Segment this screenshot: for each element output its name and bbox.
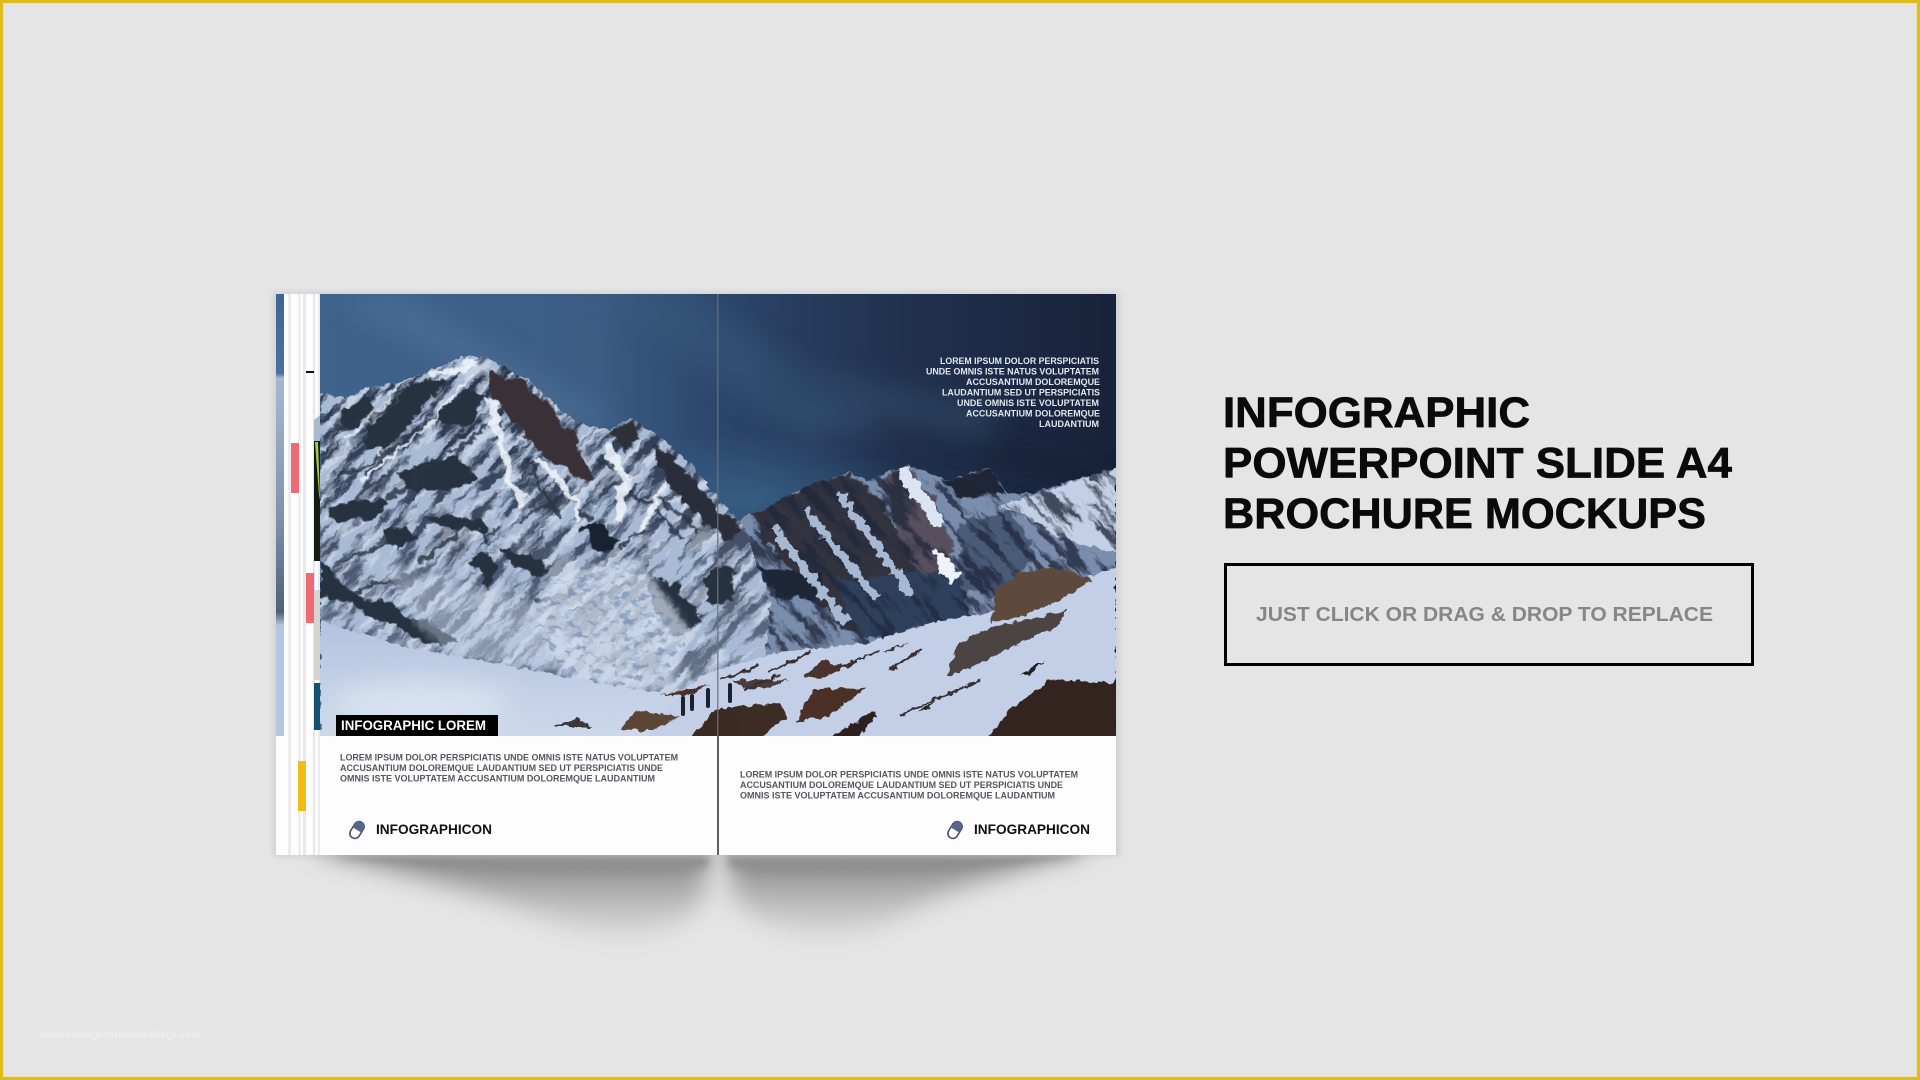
dark rock streaks <box>340 395 700 600</box>
sky <box>320 294 1116 736</box>
text block: photo caption, right page: LAUDANTIUM SED UT PERSPICIATIS <box>942 388 1101 398</box>
text block: right page: LOREM IPSUM DOLOR PERSPICIATIS UNDE OMNIS ISTE NATUS VOLUPTATEM <box>740 770 1078 780</box>
text block: photo caption, right page: LAUDANTIUM <box>1039 419 1099 430</box>
title: INFOGRAPHIC <box>1223 390 1530 437</box>
white text panels <box>320 736 1116 855</box>
foreground snowfield <box>320 620 678 736</box>
text block: photo caption, right page: ACCUSANTIUM DOLOREMQUE <box>966 408 1101 420</box>
page tab: black mark <box>306 371 314 373</box>
distant range, right page <box>738 464 1116 656</box>
watermark: www.heritagechristiancollege.com <box>39 1029 200 1041</box>
text block: left page: LOREM IPSUM DOLOR PERSPICIATIS UNDE OMNIS ISTE NATUS VOLUPTATEM <box>340 752 678 764</box>
text block: photo caption, right page: UNDE OMNIS ISTE NATUS VOLUPTATEM <box>926 366 1099 378</box>
logo: infographicon, left page: INFOGRAPHICON <box>376 822 492 837</box>
title <box>1223 390 1732 538</box>
text block: left page <box>340 752 678 784</box>
logo: infographicon, right page: INFOGRAPHICON <box>974 822 1090 837</box>
brochure mockup <box>272 292 1120 858</box>
dark rock faces <box>320 370 740 645</box>
snow slope, right page <box>640 568 1116 750</box>
title: BROCHURE MOCKUPS <box>1223 491 1706 538</box>
label: infographic lorem <box>336 715 498 736</box>
label: infographic lorem: INFOGRAPHIC LOREM <box>341 718 486 733</box>
inner page edges <box>314 415 320 730</box>
hikers <box>681 683 732 716</box>
icon: pill logo <box>946 820 964 840</box>
text block: right page: OMNIS ISTE VOLUPTATEM ACCUSANTIUM DOLOREMQUE LAUDANTIUM <box>740 790 1055 802</box>
text block: right page: ACCUSANTIUM DOLOREMQUE LAUDANTIUM SED UT PERSPICIATIS UNDE <box>740 780 1064 791</box>
text block: photo caption, right page: ACCUSANTIUM DOLOREMQUE <box>966 377 1101 388</box>
placeholder box <box>1226 564 1752 664</box>
title: POWERPOINT SLIDE A4 <box>1223 440 1732 488</box>
icon: pill logo <box>348 820 366 840</box>
text block: photo caption, right page: LOREM IPSUM DOLOR PERSPICIATIS <box>940 356 1100 367</box>
snow streaks <box>345 360 665 530</box>
stacked pages <box>276 294 320 855</box>
text block: right page <box>740 770 1078 802</box>
main mountain, left page <box>320 356 772 694</box>
text block: left page: ACCUSANTIUM DOLOREMQUE LAUDANTIUM SED UT PERSPICIATIS UNDE <box>340 763 664 774</box>
panoramic mountain photo <box>320 294 1116 736</box>
page edge shadow <box>273 292 1120 857</box>
text block: left page: OMNIS ISTE VOLUPTATEM ACCUSANTIUM DOLOREMQUE LAUDANTIUM <box>340 774 655 784</box>
page tab: yellow <box>298 761 306 811</box>
placeholder box: JUST CLICK OR DRAG & DROP TO REPLACE <box>1256 604 1713 626</box>
text block: photo caption, right page <box>926 356 1101 430</box>
logo: infographicon, left page <box>348 820 492 840</box>
boulders and rocks <box>553 567 1116 750</box>
logo: infographicon, right page <box>946 820 1090 840</box>
pale glacier slopes <box>384 561 586 672</box>
spine fold line <box>717 294 719 855</box>
page tab: pink upper <box>291 443 299 493</box>
page tab: pink lower <box>306 573 314 623</box>
brochure drop shadow <box>314 855 1092 937</box>
text block: photo caption, right page: UNDE OMNIS ISTE VOLUPTATEM <box>957 398 1099 409</box>
